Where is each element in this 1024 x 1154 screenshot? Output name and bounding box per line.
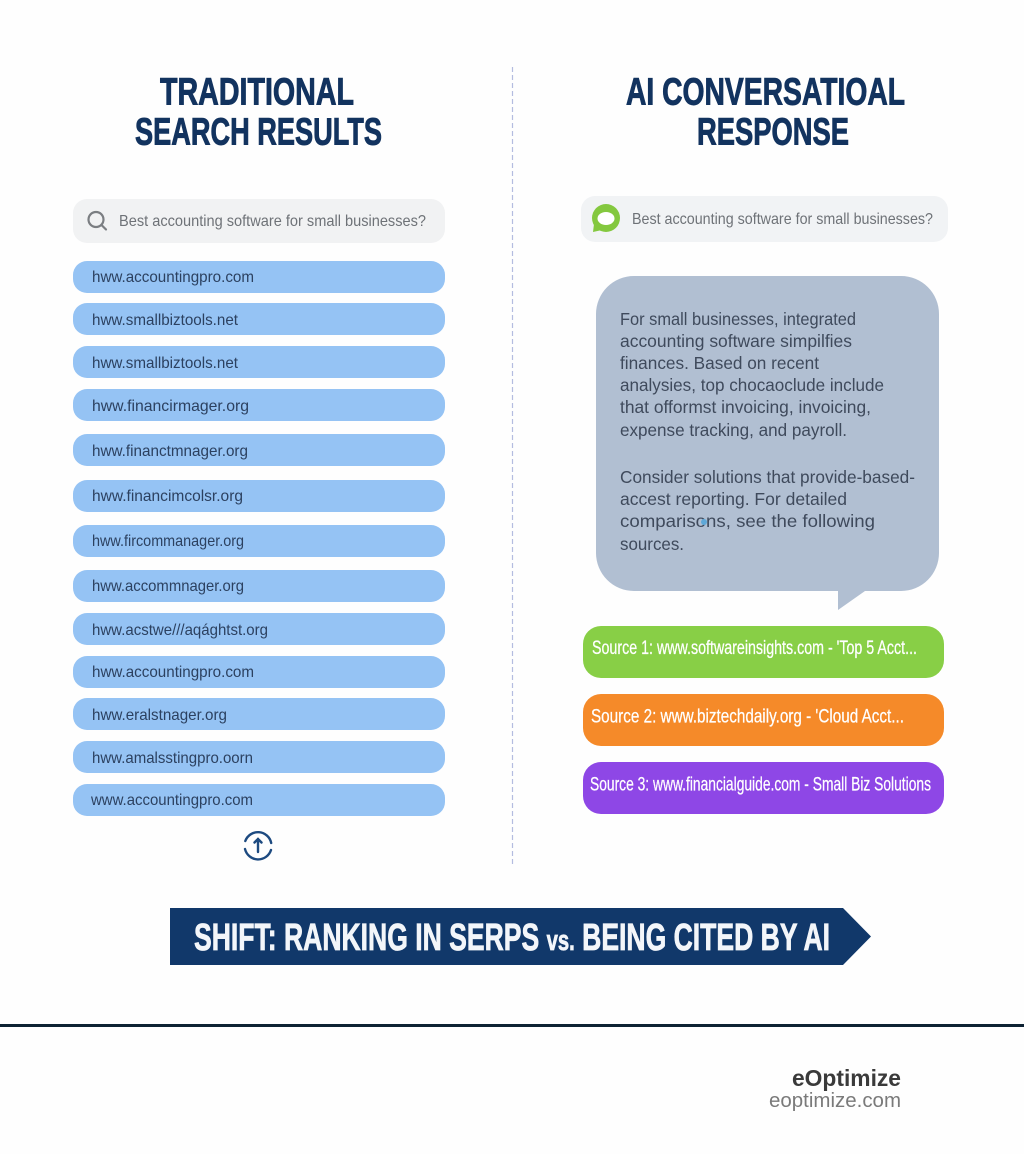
result 5: hww.financtmnager.org [92, 443, 248, 460]
result 7: hww.fircommanager.org [92, 533, 244, 550]
result 1: hww.accountingpro.com [92, 269, 254, 286]
result 12 [73, 741, 445, 773]
heading: traditional search results: SEARCH RESULTS [135, 112, 382, 154]
result 5 [73, 434, 445, 466]
response paragraph 1: For small businesses, integrated [620, 309, 856, 329]
result 3: hww.smallbiztools.net [92, 355, 239, 372]
search bar: traditional query [73, 199, 445, 243]
icon: circular up arrow [245, 832, 271, 859]
result 11 [73, 698, 445, 730]
search bar: traditional query: Best accounting software for small businesses? [119, 213, 426, 230]
result 9 [73, 613, 445, 645]
result 6 [73, 480, 445, 512]
source card 1 [583, 626, 944, 678]
footer: brand [769, 1065, 901, 1112]
icon: magnifier [88, 212, 106, 230]
response paragraph 2: accest reporting. For detailed [620, 489, 847, 509]
response paragraph 1 [620, 309, 884, 440]
source card 3 [583, 762, 944, 814]
source card 2 [583, 694, 944, 746]
footer: brand: eoptimize.com [769, 1090, 901, 1112]
heading: AI conversational response: RESPONSE [697, 112, 849, 154]
result 13 [73, 784, 445, 816]
result 2 [73, 303, 445, 335]
result 11: hww.eralstnager.org [92, 707, 227, 724]
response paragraph 2: comparisons, see the following [620, 511, 875, 531]
result 2: hww.smallbiztools.net [92, 312, 239, 329]
result 10 [73, 656, 445, 688]
result 13: www.accountingpro.com [90, 792, 253, 809]
result 10: hww.accountingpro.com [92, 664, 254, 681]
result 4: hww.financirmager.org [92, 398, 249, 415]
result 8 [73, 570, 445, 602]
response paragraph 1: analysies, top chocaoclude include [620, 375, 884, 395]
heading: traditional search results [135, 72, 382, 154]
result 12: hww.amalsstingpro.oorn [92, 750, 253, 767]
result 7 [73, 525, 445, 557]
response paragraph 2 [620, 467, 915, 554]
result 8: hww.accommnager.org [92, 578, 244, 595]
footer: brand: eOptimize [792, 1065, 901, 1091]
response paragraph 1: accounting software simpilfies [620, 331, 852, 351]
search bar: AI query: Best accounting software for small businesses? [632, 211, 933, 228]
result 3 [73, 346, 445, 378]
source card 2: Source 2: www.biztechdaily.org - 'Cloud Acct... [591, 706, 904, 728]
result 4 [73, 389, 445, 421]
artifact dot [701, 519, 707, 525]
arrow banner: the shift [170, 908, 871, 965]
list: traditional search result links [73, 261, 445, 816]
icon: green chat bubble [592, 204, 620, 232]
result 1 [73, 261, 445, 293]
response paragraph 2: Consider solutions that provide-based- [620, 467, 915, 487]
search bar: AI query [581, 196, 948, 242]
heading: traditional search results: TRADITIONAL [160, 72, 354, 114]
response paragraph 1: finances. Based on recent [620, 353, 819, 373]
arrow banner: the shift: SHIFT: RANKING IN SERPS vs. BEING CITED BY AI [194, 917, 830, 959]
result 9: hww.acstwe///aqághtst.org [92, 622, 268, 639]
response paragraph 2: sources. [620, 534, 684, 554]
speech bubble: AI response [596, 276, 939, 610]
source card 1: Source 1: www.softwareinsights.com - 'Top 5 Acct... [592, 638, 917, 659]
result 6: hww.financimcolsr.org [92, 488, 243, 505]
response paragraph 1: expense tracking, and payroll. [620, 420, 847, 440]
heading: AI conversational response [626, 72, 905, 154]
heading: AI conversational response: AI CONVERSATIOAL [626, 72, 905, 114]
response paragraph 1: that offormst invoicing, invoicing, [620, 397, 871, 417]
